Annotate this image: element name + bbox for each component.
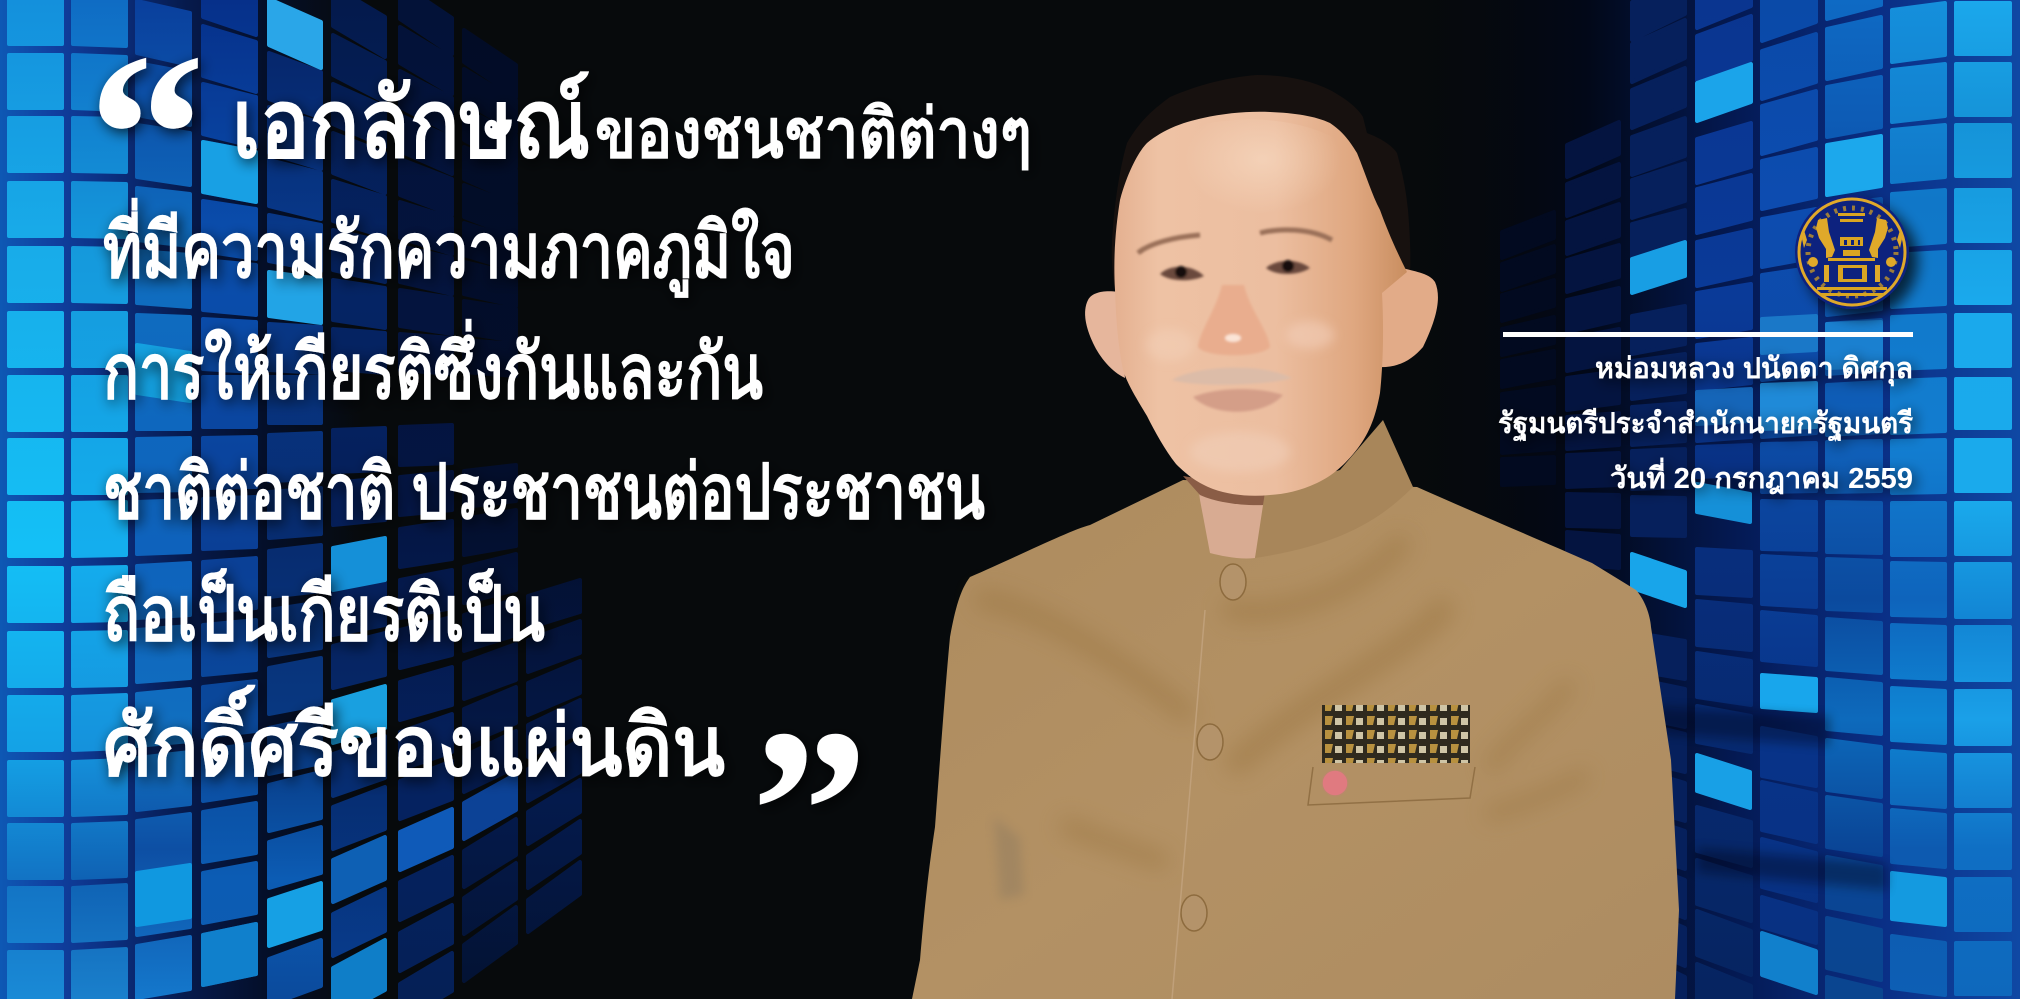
portrait: breast pocket welt [1308, 767, 1475, 805]
portrait: face features [1138, 230, 1332, 412]
background: left bright highlight tiles [137, 0, 516, 999]
attribution: date: วันที่ 20 กรกฎาคม 2559 [1610, 457, 1913, 495]
quote line 6: ศักดิ์ศรีของแผ่นดิน [103, 684, 725, 793]
background: right tile grid [1502, 0, 2010, 999]
emblem: central urn and pedestal [1817, 213, 1887, 296]
background: left blue glow [0, 0, 1100, 999]
quote line 5: ถือเป็นเกียรติเป็น [103, 568, 545, 657]
quote line 1: emphasised word: เอกลักษณ์ [232, 71, 590, 178]
attribution: position: รัฐมนตรีประจำสำนักนายกรัฐมนตรี [1498, 408, 1913, 442]
quote line 2: ที่มีความรักความภาคภูมิใจ [103, 197, 795, 298]
opening quotation mark: “ [88, 5, 206, 265]
background: right bright highlight tiles [1632, 64, 1945, 993]
portrait: forehead highlight [1120, 120, 1380, 300]
emblem: left lion [1802, 218, 1835, 282]
portrait: arm shadow [994, 817, 1024, 900]
quote line 3: การให้เกียรติซึ่งกันและกัน [103, 318, 763, 415]
background: left tile grid [9, 0, 580, 999]
portrait: pocket square [1322, 705, 1470, 763]
quote line 4: ชาติต่อชาติ ประชาชนต่อประชาชน [103, 450, 985, 535]
portrait: face [1114, 112, 1407, 496]
portrait: ear right [1372, 268, 1438, 367]
attribution: name: หม่อมหลวง ปนัดดา ดิศกุล [1595, 353, 1913, 386]
attribution text [1498, 353, 1913, 495]
portrait: jacket folds [985, 545, 1582, 860]
background: right blue glow [1400, 0, 2020, 999]
portrait: ear left [1085, 291, 1125, 378]
portrait: face highlights [1146, 321, 1334, 472]
closing quotation mark: ” [751, 681, 868, 941]
portrait: under-chin shadow [1183, 476, 1270, 505]
background: right dark stripes [1640, 706, 1887, 890]
portrait: man in gold-brown jacket [912, 75, 1679, 999]
emblem: right lion [1869, 218, 1902, 282]
portrait: placket seam [1172, 610, 1205, 999]
portrait: lapel pin [1322, 770, 1348, 796]
attribution rule [1503, 332, 1913, 337]
portrait: jacket body [912, 480, 1679, 999]
quote text [88, 5, 1032, 941]
quote line 1: remainder: ของชนชาติต่างๆ [595, 96, 1032, 172]
emblem: Office of the Prime Minister seal [1795, 195, 1909, 309]
emblem: urn detail [1843, 240, 1862, 279]
portrait: hair [1112, 75, 1410, 290]
portrait: collar right [1255, 420, 1413, 558]
portrait: buttons [1181, 564, 1246, 931]
portrait: neck [1196, 470, 1270, 559]
